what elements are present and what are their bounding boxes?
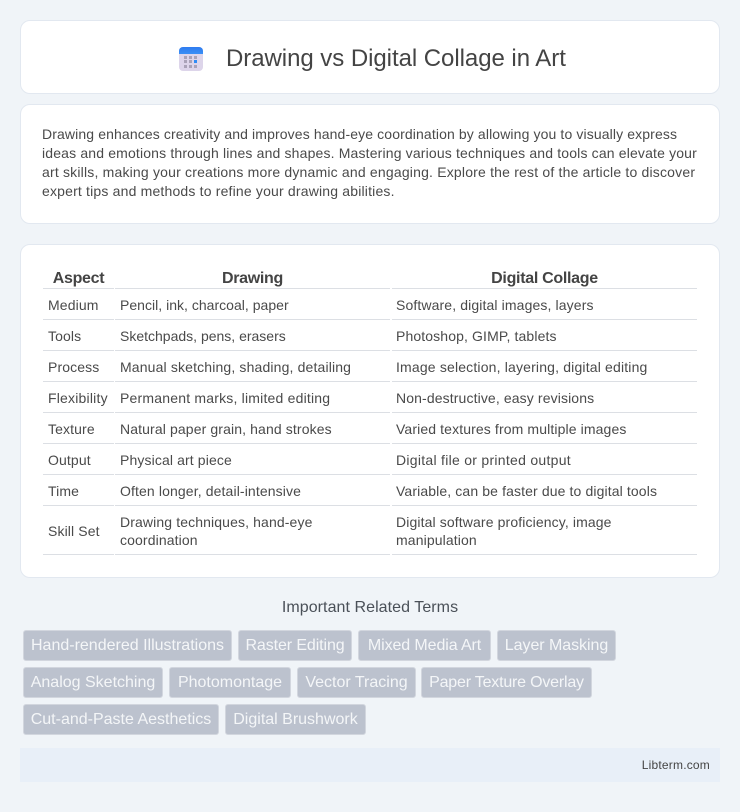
intro text xyxy=(42,126,697,199)
related terms tags: Vector Tracing xyxy=(305,674,408,691)
table rows: Medium xyxy=(48,297,99,313)
table rows: Process xyxy=(48,359,99,375)
table rows: Sketchpads, pens, erasers xyxy=(120,328,286,344)
related terms tags: Paper Texture Overlay xyxy=(429,674,584,691)
table rows: Software, digital images, layers xyxy=(396,297,594,313)
table rows: Tools xyxy=(48,328,81,344)
table rows: Digital file or printed output xyxy=(396,452,571,468)
intro text: Drawing enhances creativity and improves hand-eye coordination by allowing you to visually express xyxy=(42,126,677,142)
related terms tags: Layer Masking xyxy=(505,637,608,654)
table rows: Variable, can be faster due to digital tools xyxy=(396,483,657,499)
table header: Drawing xyxy=(222,270,283,287)
table rows: Natural paper grain, hand strokes xyxy=(120,421,332,437)
related terms tags: Analog Sketching xyxy=(31,674,155,691)
footer xyxy=(20,748,720,782)
comparison table panel xyxy=(20,244,720,578)
table rows: Physical art piece xyxy=(120,452,232,468)
table rows: Manual sketching, shading, detailing xyxy=(120,359,351,375)
related terms tags: Cut-and-Paste Aesthetics xyxy=(31,711,211,728)
table rows: Time xyxy=(48,483,79,499)
related terms tags: Raster Editing xyxy=(245,637,345,654)
table rows: manipulation xyxy=(396,532,477,548)
table rows: Photoshop, GIMP, tablets xyxy=(396,328,557,344)
table header xyxy=(53,270,598,287)
related terms tags: Mixed Media Art xyxy=(368,637,481,654)
table header: Digital Collage xyxy=(491,270,598,287)
table rows: Non-destructive, easy revisions xyxy=(396,390,594,406)
table rows: Drawing techniques, hand-eye xyxy=(120,514,312,530)
intro panel xyxy=(20,104,720,224)
related terms tags: Photomontage xyxy=(178,674,282,691)
title: Drawing vs Digital Collage in Art xyxy=(226,45,566,72)
table rows: Varied textures from multiple images xyxy=(396,421,626,437)
related terms tags xyxy=(23,630,616,735)
intro text: expert tips and methods to refine your drawing abilities. xyxy=(42,183,395,199)
footer credit: Libterm.com xyxy=(642,758,710,772)
table rows: coordination xyxy=(120,532,198,548)
table rows: Skill Set xyxy=(48,523,100,539)
related terms tags: Hand-rendered Illustrations xyxy=(31,637,224,654)
header panel xyxy=(20,20,720,94)
table header: Aspect xyxy=(53,270,104,287)
intro text: ideas and emotions through lines and shapes. Mastering various techniques and tools can elevate your xyxy=(42,145,697,161)
table rows: Pencil, ink, charcoal, paper xyxy=(120,297,289,313)
table rows: Image selection, layering, digital editing xyxy=(396,359,648,375)
table rows: Output xyxy=(48,452,91,468)
table rows: Flexibility xyxy=(48,390,108,406)
related terms tags: Digital Brushwork xyxy=(233,711,358,728)
icon: calendar xyxy=(179,47,203,71)
related terms heading: Important Related Terms xyxy=(282,599,458,616)
table rows xyxy=(43,288,697,555)
table rows: Permanent marks, limited editing xyxy=(120,390,330,406)
table rows: Often longer, detail-intensive xyxy=(120,483,301,499)
intro text: art skills, making your creations more dynamic and engaging. Explore the rest of the article to discover xyxy=(42,164,695,180)
table rows: Digital software proficiency, image xyxy=(396,514,612,530)
table rows: Texture xyxy=(48,421,95,437)
